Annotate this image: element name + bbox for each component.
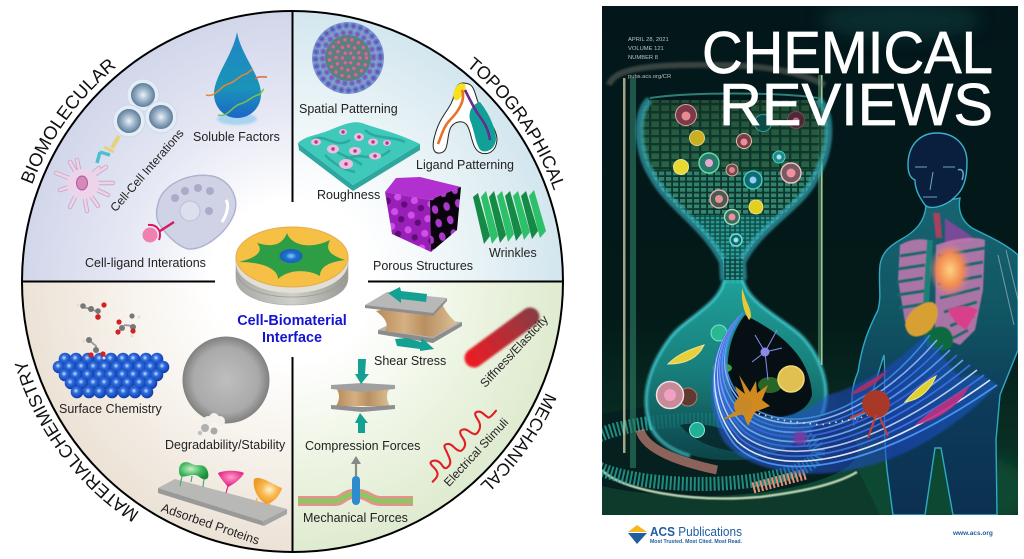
- icon: molecules on surface chemistry lattice: [53, 302, 169, 398]
- panel: Chemical Reviews journal cover: [602, 6, 1018, 515]
- icon: ligand patterning: [433, 83, 497, 154]
- icon: adsorbed proteins on plate: [158, 462, 287, 526]
- heading: MATERIALCHEMISTRY: MATERIALCHEMISTRY: [14, 364, 138, 522]
- lower hourglass bulb: [646, 280, 826, 460]
- website address: www.acs.org: [952, 530, 993, 537]
- ACS Publications logo: [628, 524, 743, 545]
- icon: electrical stimuli wave: [431, 411, 496, 482]
- hourglass frame pillars: [609, 65, 825, 468]
- icon: wrinkles: [473, 190, 546, 244]
- heading: BIOMOLECULAR: BIOMOLECULAR: [20, 59, 116, 184]
- heading: MECHANICAL: MECHANICAL: [480, 394, 556, 490]
- quadrant background: material chemistry: [22, 282, 292, 552]
- label: Ligand Patterning: Ligand Patterning: [416, 158, 514, 172]
- title: Cell-Biomaterial Interface: Cell-Biomaterial: [237, 313, 347, 329]
- cover art background: [602, 6, 1018, 515]
- label: Porous Structures: Porous Structures: [373, 259, 473, 273]
- label: Wrinkles: Wrinkles: [489, 246, 537, 260]
- label: Degradability/Stability: Degradability/Stability: [165, 438, 286, 452]
- icon: ACS diamond: [628, 525, 647, 544]
- icon: stiffness elasticity rod: [474, 317, 530, 358]
- flowing data ribbon: [711, 313, 997, 474]
- cover title: REVIEWS: [719, 72, 993, 138]
- label: Electrical Stimuli: Electrical Stimuli: [441, 415, 511, 489]
- quadrant background: biomolecular: [22, 11, 292, 282]
- icon: mechanical force membrane: [298, 456, 413, 505]
- human figure: [852, 133, 1018, 515]
- label: Cell-ligand Interations: Cell-ligand Interations: [85, 256, 206, 270]
- icon: spatial patterning: [312, 22, 384, 94]
- cells in lower bulb: [656, 288, 804, 438]
- icon: soluble factor drop: [206, 32, 267, 125]
- label: Compression Forces: Compression Forces: [305, 439, 420, 453]
- label: Roughness: Roughness: [317, 188, 380, 202]
- tagline: Most Trusted. Most Cited. Most Read.: [650, 539, 743, 545]
- human organs: [897, 213, 985, 350]
- icon: degrading sphere: [182, 336, 270, 435]
- issue information: NUMBER 8: [628, 55, 658, 61]
- icon: cell-cell interaction: [56, 79, 177, 211]
- icon: roughness surface: [298, 122, 420, 191]
- icon: shear stress block: [365, 287, 462, 351]
- panel: circular diagram of cell-biomaterial interface: [14, 10, 564, 553]
- icon: cell-ligand interaction: [142, 175, 236, 249]
- circle outline: [22, 11, 563, 552]
- hourglass neck: [724, 258, 743, 284]
- issue information: VOLUME 121: [628, 46, 664, 52]
- publisher name: ACS Publications: [650, 524, 742, 539]
- heading: TOPOGRAPHICAL: TOPOGRAPHICAL: [470, 56, 564, 190]
- upper hourglass bulb: [630, 94, 835, 285]
- hourglass base: [602, 408, 880, 515]
- quadrant background: topographical: [292, 11, 563, 282]
- icon: porous structure cube: [385, 177, 461, 252]
- issue information: pubs.acs.org/CR: [628, 74, 671, 80]
- label: Adsorbed Proteins: Adsorbed Proteins: [159, 501, 261, 548]
- icon: cell on biomaterial disc: [236, 227, 348, 305]
- title: Cell-Biomaterial Interface: Interface: [262, 330, 322, 346]
- label: Mechanical Forces: Mechanical Forces: [303, 511, 408, 525]
- label: Soluble Factors: Soluble Factors: [193, 130, 280, 144]
- cells on ribbon: [722, 370, 970, 445]
- label: Spatial Patterning: Spatial Patterning: [299, 102, 398, 116]
- floating cells in upper bulb: [674, 104, 804, 246]
- cover title: CHEMICAL: [702, 20, 993, 86]
- label: Shear Stress: Shear Stress: [374, 354, 446, 368]
- cover artwork: [602, 6, 1018, 542]
- icon: compression block: [331, 359, 395, 433]
- label: Cell-Cell Interations: Cell-Cell Interations: [107, 126, 187, 214]
- issue information: APRIL 28, 2021: [628, 37, 669, 43]
- label: Siffness/Elasticity: Siffness/Elasticity: [477, 312, 551, 390]
- label: Surface Chemistry: Surface Chemistry: [59, 402, 163, 416]
- quadrant background: mechanical: [292, 282, 563, 552]
